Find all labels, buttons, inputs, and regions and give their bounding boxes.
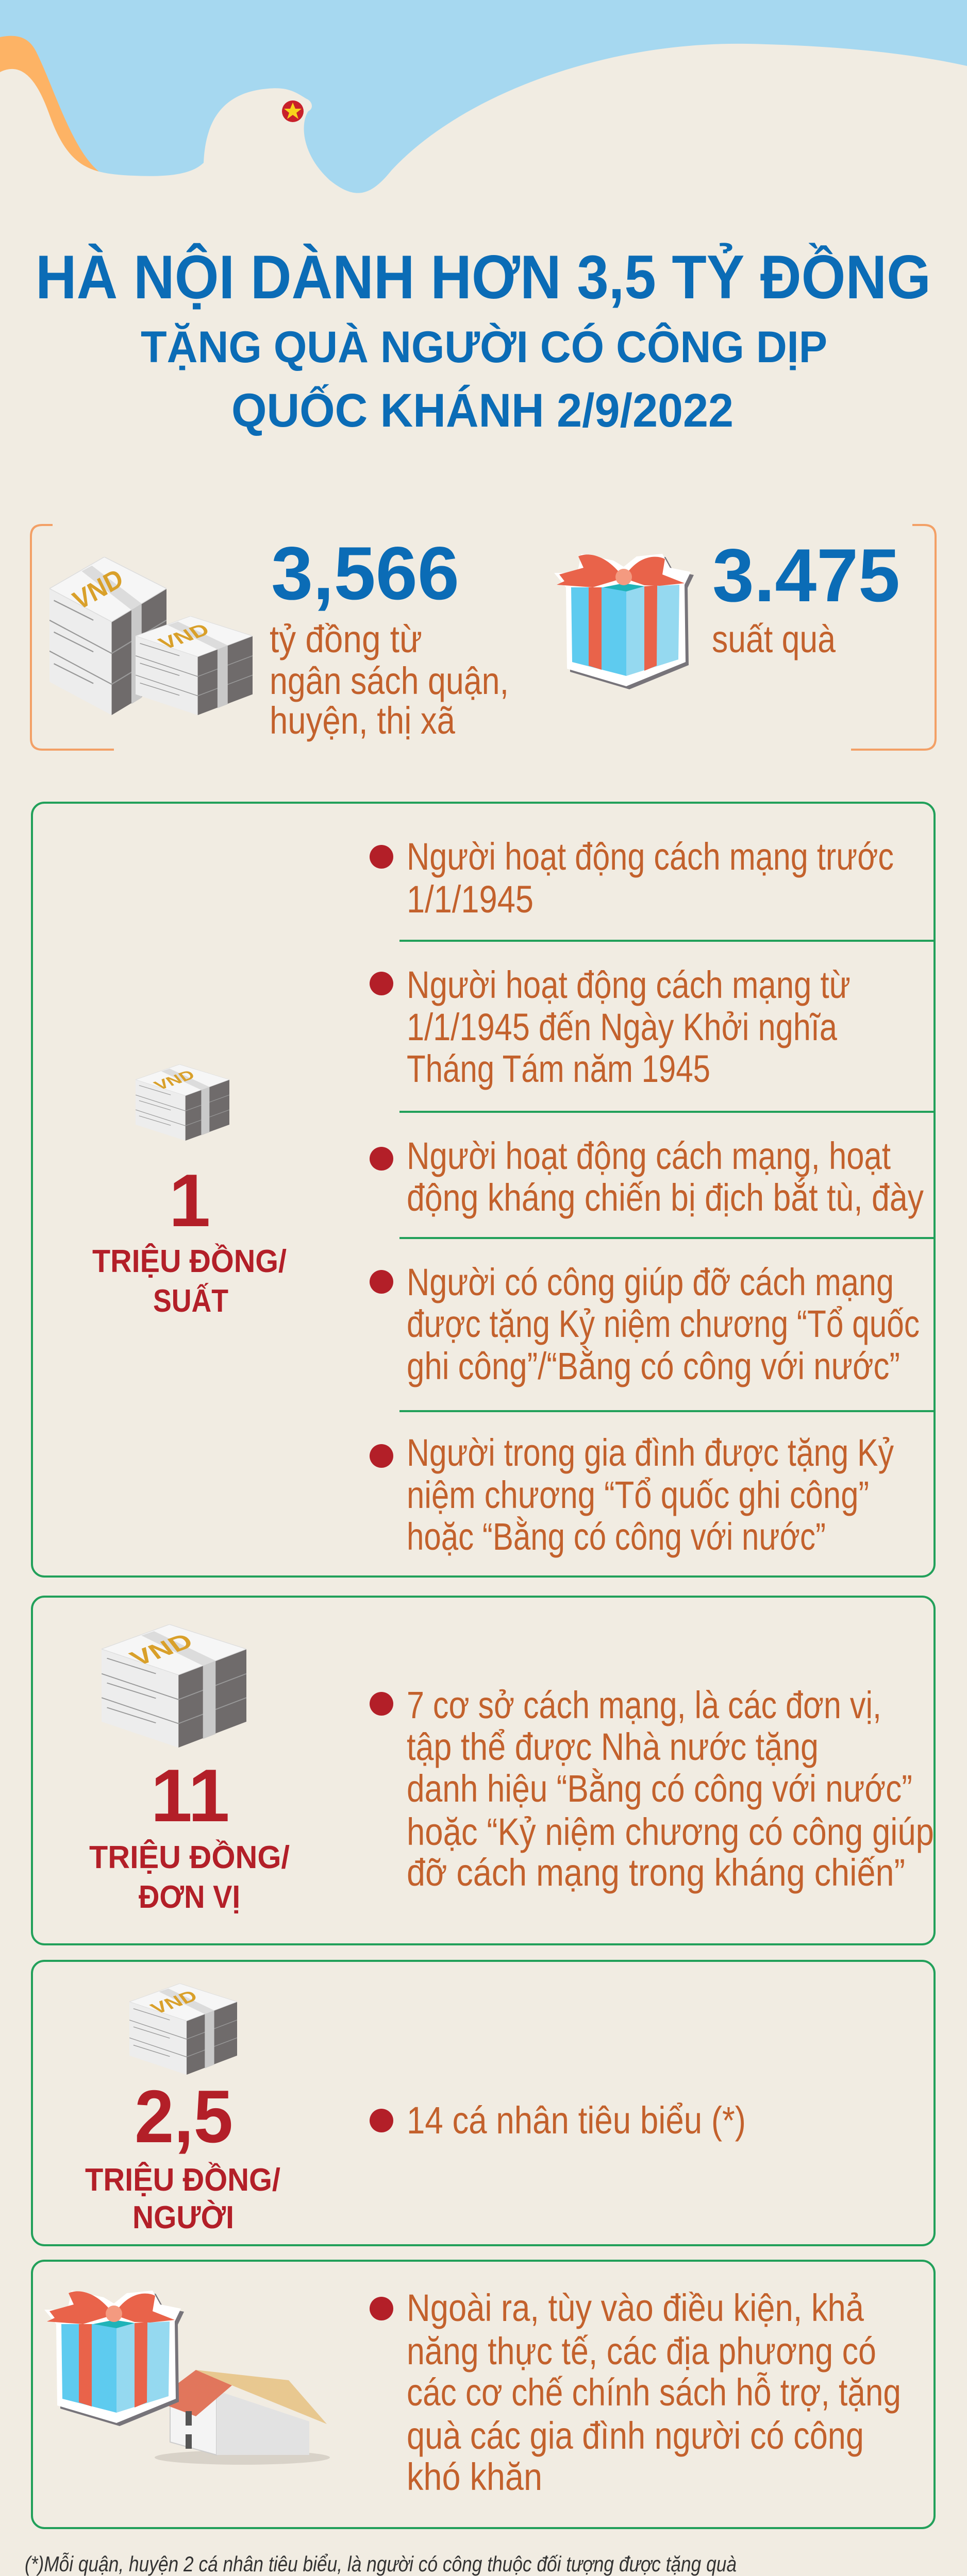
bullet: khó khăn xyxy=(407,2455,542,2498)
stat: 3.475 gifts: 3.475 xyxy=(712,533,900,617)
amount label: TRIỆU ĐỒNG/ xyxy=(85,2162,280,2198)
icon: gift xyxy=(554,554,694,689)
amount label: NGƯỜI xyxy=(132,2200,234,2235)
amount label: ĐƠN VỊ xyxy=(139,1879,240,1915)
bullet 2 xyxy=(370,963,851,1090)
amount label xyxy=(85,2075,280,2235)
amount label xyxy=(89,1754,290,1915)
bullet: Ngoài ra, tùy vào điều kiện, khả xyxy=(407,2286,864,2329)
stat: 3,566 budget: ngân sách quận, xyxy=(270,659,509,702)
icon: gift xyxy=(44,2291,184,2426)
amount label: 2,5 xyxy=(135,2075,233,2158)
stat: 3.475 gifts: suất quà xyxy=(712,618,836,660)
panel: other support xyxy=(32,2261,935,2528)
bullet: tập thể được Nhà nước tặng xyxy=(407,1725,819,1768)
bullet: quà các gia đình người có công xyxy=(407,2414,864,2457)
bullet 2: Tháng Tám năm 1945 xyxy=(407,1047,710,1090)
title xyxy=(36,242,931,437)
bullet 5 xyxy=(370,1431,894,1558)
amount label: TRIỆU ĐỒNG/ xyxy=(89,1840,290,1875)
bullet xyxy=(370,1684,934,1894)
bullet 2: Người hoạt động cách mạng từ xyxy=(407,963,851,1006)
bullet 3 xyxy=(370,1134,924,1219)
bullet 4 xyxy=(370,1261,920,1387)
stat: 3,566 budget: huyện, thị xã xyxy=(270,699,456,742)
bullet 1 xyxy=(370,835,894,921)
amount label: 11 xyxy=(151,1754,230,1837)
footnote: (*)Mỗi quận, huyện 2 cá nhân tiêu biểu, là người có công thuộc đối tượng được tặng quà xyxy=(25,2552,737,2576)
bullet 5: niệm chương “Tổ quốc ghi công” xyxy=(407,1473,869,1516)
bullet 2: 1/1/1945 đến Ngày Khởi nghĩa xyxy=(407,1006,838,1048)
stat: 3,566 budget xyxy=(270,531,509,742)
amount label: TRIỆU ĐỒNG/ xyxy=(92,1244,287,1279)
icon: money xyxy=(136,1064,229,1141)
panel: 11 triệu đồng/đơn vị xyxy=(32,1597,935,1944)
amount label: 1 xyxy=(169,1159,210,1242)
amount label xyxy=(92,1159,287,1319)
title: QUỐC KHÁNH 2/9/2022 xyxy=(231,384,733,437)
bullet: 7 cơ sở cách mạng, là các đơn vị, xyxy=(407,1684,881,1726)
icon: house xyxy=(155,2370,330,2465)
amount label: SUẤT xyxy=(153,1283,228,1319)
header: sky with dove shape xyxy=(0,0,967,216)
icon: money xyxy=(129,1984,237,2075)
bullet: năng thực tế, các địa phương có xyxy=(407,2330,876,2372)
stat: 3.475 gifts xyxy=(712,533,900,660)
stat: 3,566 budget: tỷ đồng từ xyxy=(270,618,422,660)
bullet: đỡ cách mạng trong kháng chiến” xyxy=(407,1851,905,1894)
panel: 1 triệu đồng/suất xyxy=(32,803,935,1577)
bullet 5: hoặc “Bằng có công với nước” xyxy=(407,1515,826,1558)
panel: 2,5 triệu đồng/người xyxy=(32,1961,935,2245)
bullet: 14 cá nhân tiêu biểu (*) xyxy=(407,2099,746,2142)
bullet 1: 1/1/1945 xyxy=(407,878,533,921)
icon: money xyxy=(102,1624,246,1748)
icon: money stacks xyxy=(49,557,253,715)
bullet xyxy=(370,2286,901,2498)
stat: 3,566 budget: 3,566 xyxy=(271,531,459,615)
panel: summary xyxy=(31,525,936,750)
title: TẶNG QUÀ NGƯỜI CÓ CÔNG DỊP xyxy=(141,323,827,372)
